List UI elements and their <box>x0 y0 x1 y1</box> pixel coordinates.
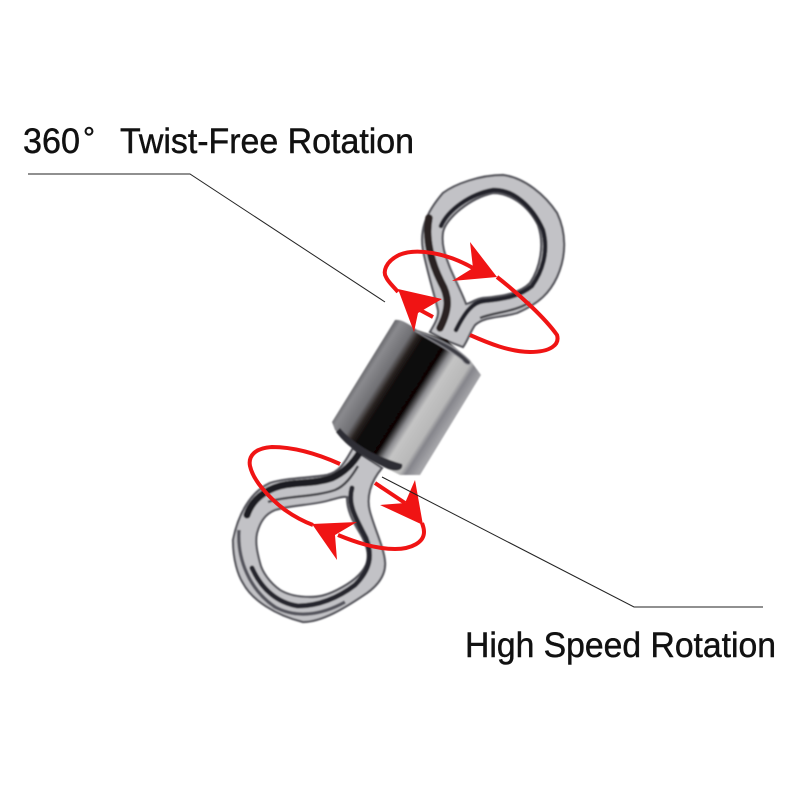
arrowhead: upper right <box>452 242 497 281</box>
arrowhead: lower right <box>380 480 423 525</box>
heading: 360 twist-free rotation: 360 <box>23 122 80 161</box>
swivel barrel <box>332 320 481 475</box>
ring left dark outer band <box>239 530 345 614</box>
ring lower edge dark line <box>480 302 530 318</box>
ring dark inner band <box>441 190 545 330</box>
leader line: top callout <box>28 174 385 302</box>
lower swivel ring <box>233 448 385 622</box>
ring dark top band <box>247 452 360 515</box>
ring left dark strand <box>428 218 447 328</box>
label: high speed rotation: High Speed Rotation <box>465 626 776 665</box>
upper swivel ring <box>422 175 564 347</box>
ring dark right inner band <box>252 488 370 606</box>
arrowhead: lower left <box>312 522 357 560</box>
heading: 360 twist-free rotation: ° <box>83 122 95 155</box>
leader line: bottom callout <box>382 477 763 607</box>
rotation arrow: upper <box>385 242 558 352</box>
arrowhead: upper left <box>398 289 442 332</box>
rotation arrow: lower <box>250 447 424 560</box>
ring thin line under top band <box>268 466 358 502</box>
barrel bottom end shade <box>336 428 402 470</box>
heading: 360 twist-free rotation: Twist-Free Rotation <box>120 122 414 161</box>
barrel top rim <box>415 331 470 365</box>
